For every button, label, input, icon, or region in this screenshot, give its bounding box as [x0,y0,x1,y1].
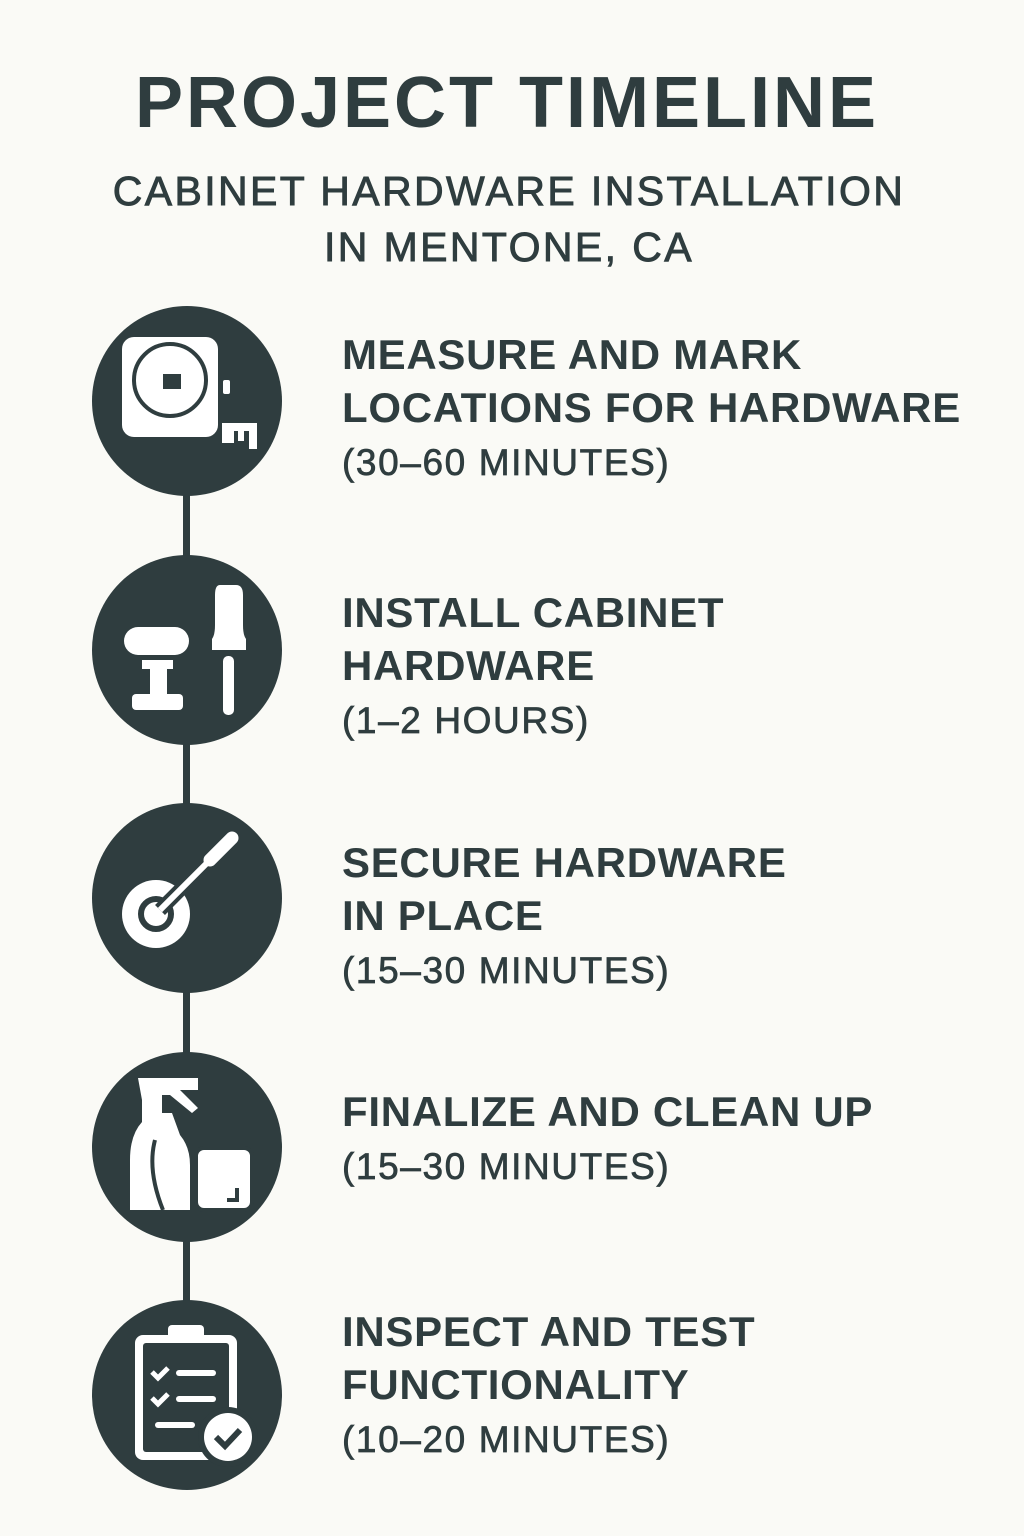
icon: clipboard check [92,1300,282,1490]
icon: spray bottle and sponge [92,1052,282,1242]
icon: secure hardware [92,803,282,993]
step 4 text: FINALIZE AND CLEAN UP [342,1088,873,1135]
step 2 text: (1–2 HOURS) [342,700,590,741]
step 3 text: (15–30 MINUTES) [342,950,670,991]
icon: tape measure [92,306,282,496]
step 5 text: FUNCTIONALITY [342,1361,689,1408]
icon: knob and screwdriver [92,555,282,745]
step 4 text [342,1088,873,1187]
step 3 text [342,839,787,991]
subtitle [113,168,905,270]
subtitle: CABINET HARDWARE INSTALLATION [113,168,905,214]
step 5 text: (10–20 MINUTES) [342,1419,670,1460]
step 3 text: SECURE HARDWARE [342,839,787,886]
step 3 text: IN PLACE [342,892,544,939]
step 5 text: INSPECT AND TEST [342,1308,755,1355]
step 4 text: (15–30 MINUTES) [342,1146,670,1187]
connector line [183,400,190,1395]
step 5 text [342,1308,755,1460]
step 1 text: MEASURE AND MARK [342,331,802,378]
step 1 text: LOCATIONS FOR HARDWARE [342,384,961,431]
step 1 text [342,331,961,483]
step 2 text: HARDWARE [342,642,595,689]
title: PROJECT TIMELINE [135,63,879,143]
subtitle: IN MENTONE, CA [324,224,694,270]
step 2 text [342,589,724,741]
step 1 text: (30–60 MINUTES) [342,442,670,483]
step 2 text: INSTALL CABINET [342,589,724,636]
